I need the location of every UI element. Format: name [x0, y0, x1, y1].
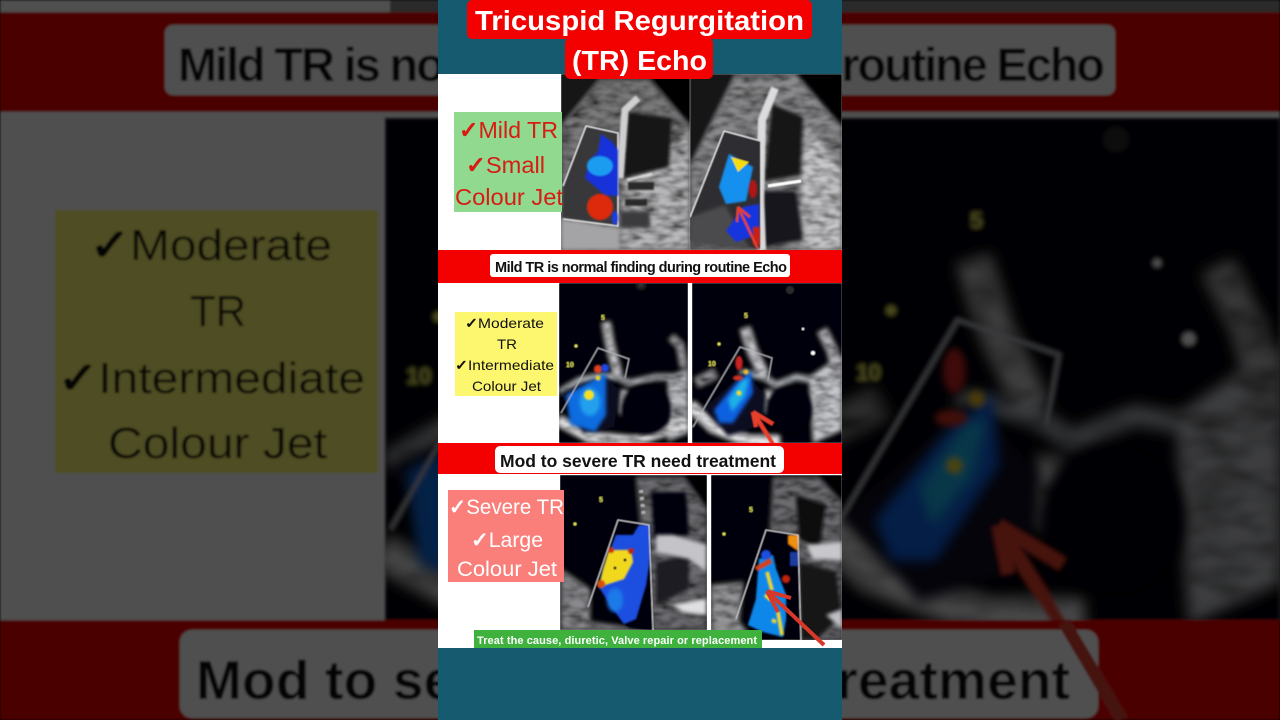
backdrop moderate label: ✓Moderate	[90, 221, 332, 270]
backdrop moderate label	[55, 210, 378, 473]
banner: moderate to severe note: Mod to severe TR need treatment	[500, 451, 776, 471]
centre panel	[438, 0, 842, 720]
label: severe TR	[448, 490, 564, 582]
label: mild TR	[454, 112, 564, 212]
title: Tricuspid Regurgitation	[475, 5, 804, 36]
label: mild TR: ✓Mild TR	[459, 117, 558, 143]
label: severe TR: Colour Jet	[457, 558, 557, 581]
arrow: severe TR jet	[767, 591, 824, 645]
backdrop moderate label: ✓Intermediate	[58, 354, 365, 403]
echo image: moderate TR right: 10	[708, 361, 716, 368]
backdrop echo images	[381, 111, 1280, 627]
echo image: severe TR left: 5	[599, 497, 603, 504]
backdrop moderate label: TR	[190, 287, 246, 336]
echo image: severe TR right	[711, 475, 842, 640]
echo image: severe TR left	[560, 475, 707, 630]
backdrop moderate label: Colour Jet	[108, 419, 327, 468]
echo image: moderate TR left: 5	[601, 315, 605, 322]
backdrop top banner	[0, 12, 1280, 112]
label: mild TR: ✓Small	[466, 152, 545, 178]
banner: treatment note: Treat the cause, diuretic, Valve repair or replacement	[477, 635, 757, 647]
label: severe TR: ✓Large	[471, 529, 543, 552]
label: moderate TR: ✓Intermediate	[455, 357, 554, 373]
label: moderate TR: TR	[497, 336, 517, 352]
banner: mild TR note: Mild TR is normal finding during routine Echo	[495, 260, 787, 276]
label: moderate TR	[455, 312, 557, 396]
echo image: moderate TR right: 5	[744, 313, 748, 320]
title	[467, 0, 812, 79]
echo image: severe TR right: 5	[749, 507, 753, 514]
echo image: moderate TR right	[690, 283, 842, 444]
banner: mild TR note	[438, 250, 842, 283]
banner: moderate to severe note	[438, 443, 842, 474]
label: moderate TR: ✓Moderate	[465, 315, 544, 331]
echo image: mild TR left	[561, 74, 690, 250]
backdrop top banner: Mild TR is normal finding during routine Echo	[178, 38, 1105, 91]
title: (TR) Echo	[572, 45, 707, 76]
label: moderate TR: Colour Jet	[472, 378, 541, 394]
echo image: moderate TR left	[558, 281, 688, 443]
label: mild TR: Colour Jet	[455, 184, 564, 210]
backdrop bottom banner	[0, 620, 1280, 720]
banner: treatment note	[474, 630, 762, 648]
echo image: moderate TR left: 10	[566, 362, 574, 369]
backdrop bottom banner: Mod to severe TR need treatment	[196, 649, 1070, 711]
label: severe TR: ✓Severe TR	[449, 496, 564, 519]
echo image: mild TR right	[690, 74, 842, 250]
